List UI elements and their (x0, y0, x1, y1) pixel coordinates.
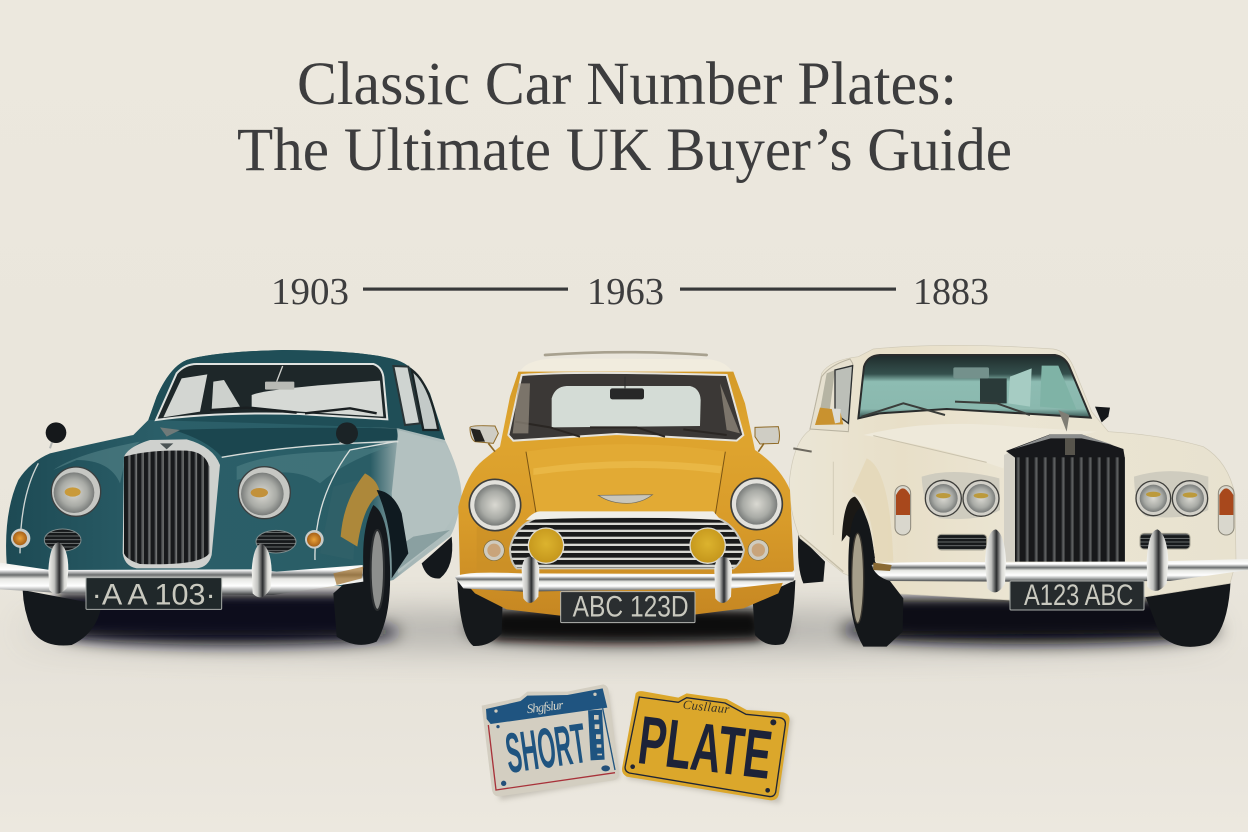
headlights (469, 478, 782, 561)
bumper (455, 557, 795, 603)
headlights (51, 467, 290, 519)
windscreen (858, 355, 1091, 418)
mirrors (46, 422, 358, 448)
plate badge: plate: Cusllaur (682, 698, 730, 716)
floor shadow (20, 614, 1220, 646)
body (789, 345, 1236, 600)
timeline: 1883 (913, 271, 989, 313)
plate badge: plate (622, 691, 792, 803)
body (6, 350, 462, 587)
body (458, 372, 794, 616)
windscreen (156, 364, 387, 420)
timeline: 1963 (587, 271, 664, 313)
vents (937, 533, 1190, 550)
timeline (271, 271, 989, 313)
tyres (23, 537, 452, 646)
front right tyre (333, 505, 390, 645)
ground shade (493, 610, 760, 638)
mirrors (470, 426, 779, 452)
mirror (1095, 407, 1110, 422)
fog lamps (528, 528, 725, 563)
number plate: ABC 123D (573, 591, 689, 624)
headlights (922, 471, 1208, 519)
grille (1004, 434, 1125, 562)
number plate: A123 ABC (1024, 579, 1133, 612)
badge (598, 495, 653, 503)
ground shade (57, 593, 353, 635)
bumper (0, 542, 363, 597)
plate badge: plate: PLATE (634, 702, 776, 794)
roof (148, 350, 445, 440)
roof rack (545, 352, 707, 355)
roof (519, 358, 733, 373)
plate badge: short: SHORT (502, 712, 590, 786)
title: Classic Car Number Plates: (297, 51, 957, 118)
title (237, 51, 1012, 184)
side lamps and vents (11, 529, 324, 553)
side window (810, 359, 853, 432)
tyres (798, 535, 1231, 647)
body highlights (20, 428, 460, 578)
tyres (457, 580, 795, 646)
car: cream saloon (789, 345, 1248, 647)
wheel hub (852, 533, 864, 623)
side windows (393, 366, 438, 430)
car: yellow mini (455, 352, 795, 646)
number plate: ·A A 103· (92, 579, 216, 612)
title: The Ultimate UK Buyer’s Guide (237, 117, 1012, 184)
timeline: 1903 (271, 271, 349, 313)
plate badge: short: Shgfslur (526, 698, 564, 716)
ground shade (890, 598, 1173, 635)
bumper (872, 529, 1248, 592)
front left tyre (848, 508, 903, 647)
windscreen (508, 373, 743, 441)
mascot (1058, 410, 1069, 432)
grille (123, 427, 220, 568)
wheel hub (371, 530, 384, 610)
hood (477, 444, 725, 570)
side lamps (895, 486, 1234, 535)
car: teal saloon (0, 350, 462, 646)
body shading (793, 424, 1097, 572)
plate badge: short (482, 684, 620, 800)
grille (510, 511, 744, 568)
